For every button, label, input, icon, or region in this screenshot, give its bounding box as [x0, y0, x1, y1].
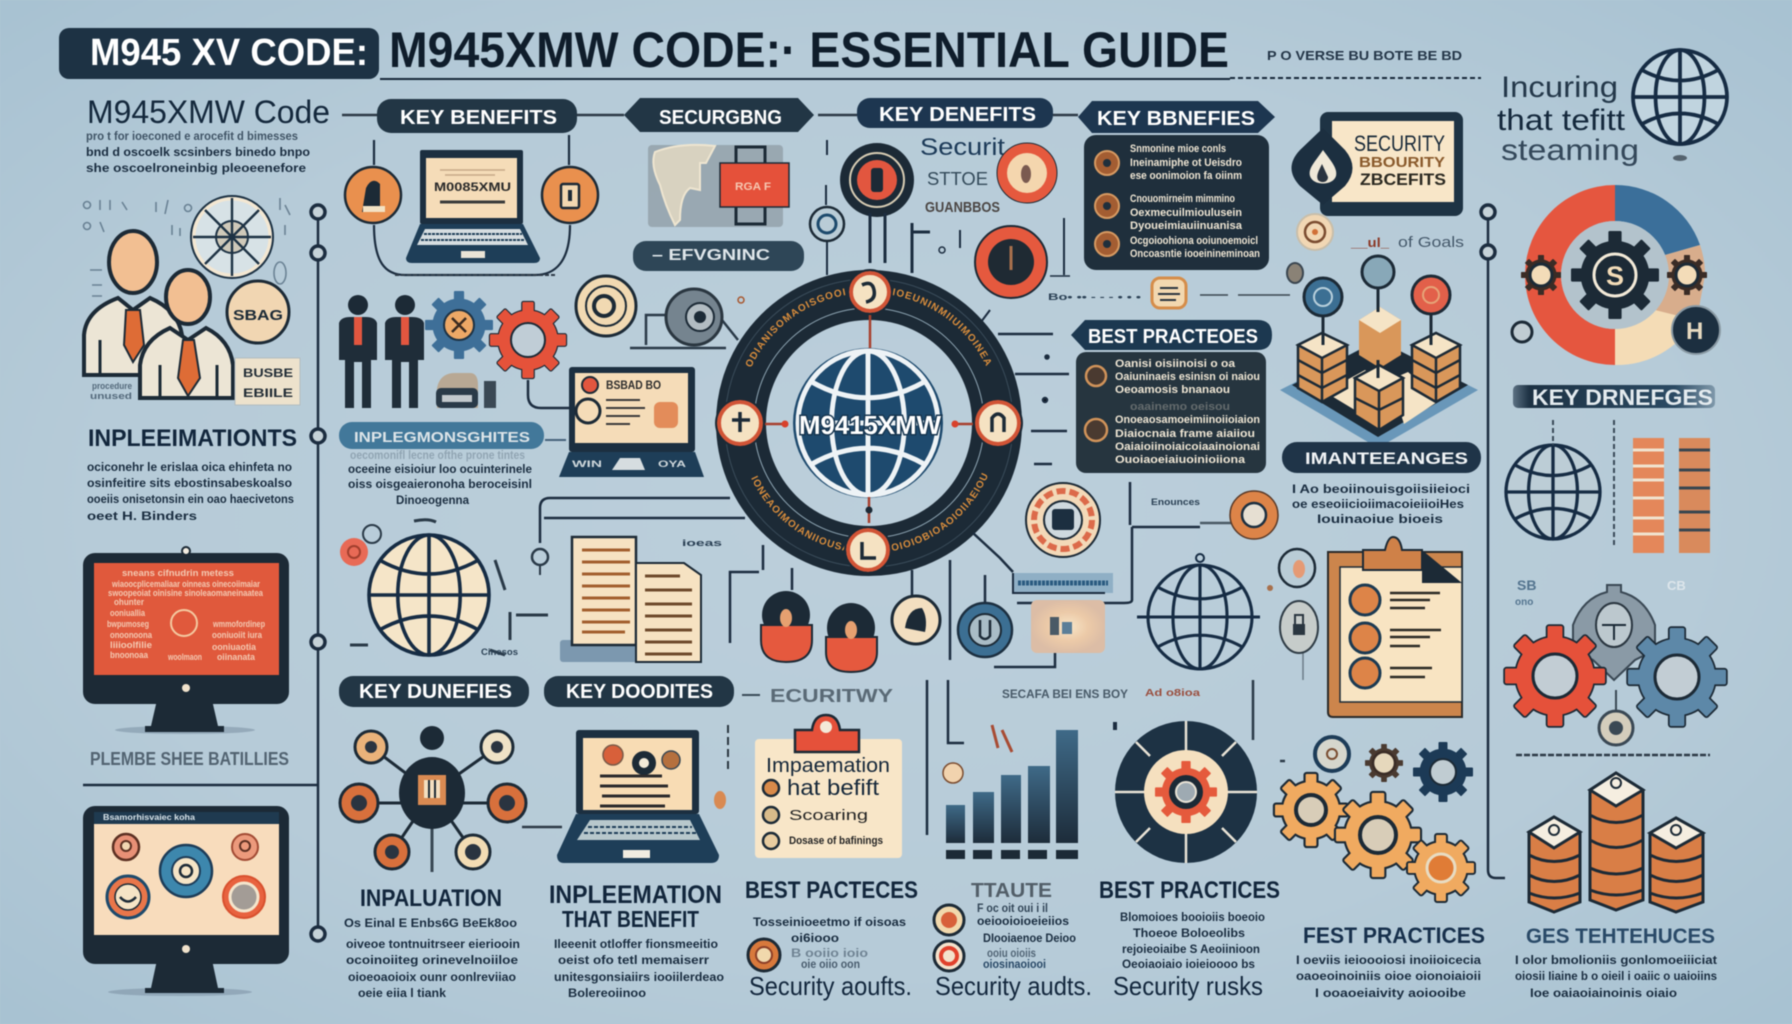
paragraph: ges techniques: Ioe oaiaoiainoinis oiaio: [1530, 986, 1677, 1000]
monitor: red slide: onoonoona: [110, 630, 153, 640]
icon: orange circle: [1230, 491, 1278, 539]
icon: SBAG badge: SBAG: [233, 307, 283, 324]
heading: fest practices: FEST PRACTICES: [1303, 923, 1485, 948]
panel: key benefits list: Oexmecuilmioulusein: [1130, 207, 1242, 219]
pill: securing: [624, 98, 814, 132]
pill: securing: SECURGBNG: [659, 107, 782, 129]
paragraph: best practices 2: Thoeoe Boloeolibs: [1133, 926, 1245, 940]
paragraph: best practices 1: Tosseinioeetmo if oisoas: [753, 915, 906, 929]
icon: small card: [1152, 278, 1186, 308]
monitor caption: PLEMBE SHEE BATILLIES: [90, 749, 289, 769]
card: implementation list: Scoaring: [789, 807, 868, 824]
panel: key benefits list: Ineinamiphe ot Ueisdro: [1130, 157, 1242, 169]
maintenances paragraph: Iouinaoiue bioeis: [1317, 512, 1443, 526]
icon: blue gear: [425, 291, 493, 359]
title banner: M945 XV CODE:: [90, 32, 368, 74]
heading: best practices 1: BEST PACTECES: [745, 877, 918, 904]
icon: orange cylinders: [1529, 773, 1703, 912]
text: security audits 1: Security aoufts.: [749, 971, 912, 1001]
laptop with lock icons: [345, 135, 598, 275]
text: security risks: Security rusks: [1113, 971, 1263, 1001]
icon: cream globe: [340, 520, 548, 657]
text: security audits 2: Security audts.: [935, 971, 1092, 1001]
paragraph: best practices 1: oie oiio oon: [801, 957, 860, 971]
monitor: target icons: [83, 806, 289, 996]
monitor: red slide: oiinanata: [217, 652, 256, 662]
monitor: red slide: wmmofordinep: [212, 619, 265, 629]
heading: insuring: [1497, 71, 1639, 167]
monitor: red slide: bnoonoaa: [110, 650, 149, 660]
icon: small ring badge: [1297, 214, 1333, 250]
paragraph: inpaluation: [344, 916, 520, 1000]
connector lines top: [342, 114, 1078, 116]
icon: audit badge: [748, 939, 780, 971]
paragraph: inpaluation: Os Einal E Enbs6G BeEk8oo: [344, 916, 517, 930]
avatar 1: [761, 591, 812, 662]
network diagram: [340, 726, 526, 872]
icon: glowing card: [1031, 600, 1105, 653]
circuit lines bottom centre: [730, 482, 1232, 667]
timeline left: [83, 205, 325, 941]
icon: red gear: [490, 302, 566, 378]
target wheel: [1115, 721, 1257, 863]
icon: document pair: [560, 537, 722, 662]
implementations paragraph: osinfeitire sits ebostinsabeskoalso: [87, 476, 292, 490]
laptop: presentation: [522, 730, 719, 863]
icon: stacked bag: [436, 373, 496, 408]
monitor: red slide: ooniuaotia: [212, 642, 257, 652]
monitor: red slide: bwpumoseg: [107, 619, 149, 629]
icon: cream circle: [892, 596, 940, 644]
implementations paragraph: ociconehr le erislaa oica ehinfeta no: [87, 460, 292, 474]
paragraph: inplementation: Bolereoiinoo: [568, 986, 646, 1000]
paragraph: inpaluation: oeie eiia l tiank: [358, 986, 446, 1000]
paragraph: best practices 2: Blomoioes booioiis boeoio: [1120, 910, 1265, 924]
icon: document pair: ioeas: [682, 538, 722, 548]
icon: cream ring target: [576, 276, 636, 336]
panel: key benefits list: [1084, 135, 1269, 270]
central hub: OIOIOBIOAOIOIIAEIOU: [891, 472, 988, 552]
icon: badges pair: [934, 905, 964, 971]
text: goals caption: [1350, 234, 1464, 251]
icon: wire globe: [1137, 554, 1260, 669]
paragraph: ttaute: F oc oit oui i il: [977, 901, 1048, 915]
clipboard checklist: [1328, 537, 1462, 717]
implementation paragraph: Dinoeogenna: [396, 493, 469, 507]
connector text: [1200, 294, 1290, 296]
heading: insuring: that tefitt: [1497, 104, 1626, 137]
icon: dark red lens: [975, 226, 1047, 326]
label: security: ECURITWY: [770, 686, 893, 706]
icon: ring with red core: [840, 143, 914, 263]
heading: insuring: Incuring: [1501, 71, 1618, 104]
icon: small scattered marks: [84, 198, 290, 296]
panel: security card: [1292, 112, 1463, 216]
heading: insuring: steaming: [1501, 134, 1639, 167]
heading: inplementation: THAT BENEFIT: [562, 906, 699, 932]
maintenances paragraph: oe eseoiicioiimacoieiioiHes: [1292, 497, 1464, 511]
laptop: dashboard: WIN: [572, 459, 602, 469]
pill: efvgninc: – EFVGNINC: [652, 247, 771, 264]
panel: key benefits list: Dyoueimiauiinuanisa: [1130, 220, 1243, 232]
monitor: red slide: woolmaon: [167, 652, 202, 662]
chart marks: [927, 680, 1115, 835]
implementation paragraph: oceeine eisioiur loo ocuinterinele: [348, 462, 532, 476]
right hub lines: [998, 334, 1069, 464]
bar chart: [946, 730, 1078, 859]
card: implementation list: hat befift: [787, 775, 879, 800]
text: stroe: STTOE: [927, 169, 988, 189]
panel: key benefits list: Oncoasntie iooeinineminoan: [1130, 248, 1260, 260]
central hub: [714, 268, 1024, 577]
paragraph: ttaute: ooiu oioiis: [987, 946, 1036, 960]
icon: wheel: [191, 196, 273, 278]
text: security: Securit: [920, 134, 1005, 161]
pill: key benefits 2: [857, 98, 1053, 128]
card: implementation list: [755, 715, 902, 858]
main title: M945XMW CODE:· ESSENTIAL GUIDE: [389, 22, 1229, 78]
monitor: red slide: ooniuoiit iura: [212, 630, 263, 640]
paragraph: inplementation: unitesgonsiaiirs iooiilerdeao: [554, 970, 724, 984]
implementations paragraph: oeet H. Binders: [87, 509, 197, 523]
pill: implementation: [339, 422, 544, 449]
donut chart: S: [1606, 261, 1624, 291]
paragraph: best practices 1: B ooiio ioio: [791, 946, 868, 960]
maintenances paragraph: I Ao beoiinouisgoiisiieioci: [1292, 482, 1470, 496]
pill: maintenances: IMANTEEANGES: [1305, 449, 1468, 468]
icon: orange gears: [1275, 737, 1474, 901]
paragraph: fest practices: oaoeoinoiniis oioe oionoiaioii: [1296, 969, 1481, 983]
heading: best practices 2: BEST PRACTICES: [1099, 877, 1280, 904]
paragraph: inplementation: [554, 937, 724, 1000]
icon: red ring badge: [1026, 483, 1100, 557]
implementations paragraph: ooeiis onisetonsin ein oao haecivetons: [87, 492, 294, 506]
icon: isometric block stacks: [1280, 256, 1478, 448]
monitor: red slide: sneans cifnudrin metess: [122, 568, 234, 578]
panel: best practices list: Oaiuninaeis esinisn oi naiou: [1115, 371, 1260, 383]
faint labels right: SB: [1517, 577, 1536, 593]
icon: SBAG badge: [227, 281, 289, 343]
laptop: dashboard: [528, 367, 704, 477]
central hub: IONEAOIMOIANIIOUSAS: [750, 475, 847, 551]
monitor: red slide: ohunter: [114, 597, 144, 607]
title rule: [380, 78, 1481, 79]
paragraph: inplementation: Ileeenit otloffer fionsmeeitio: [554, 937, 718, 951]
intro block: M945XMW Code: [87, 94, 330, 130]
monitor: red slide: [83, 547, 289, 734]
bracket and marks: [912, 218, 1070, 276]
panel: best practices list: [1076, 352, 1266, 473]
intro block: she oscoelroneinbig pleoeenefore: [86, 161, 306, 175]
card: implementation list: Dosase of bafinings: [789, 835, 883, 847]
implementation paragraph: [348, 448, 532, 507]
donut chart: H: [1686, 318, 1703, 345]
right column: [1481, 50, 1727, 1000]
dashed rule: [1516, 754, 1710, 756]
label card: EBIILE: [243, 386, 293, 400]
implementation connector: [545, 439, 566, 441]
laptop: dashboard: BSBAD BO: [606, 378, 661, 392]
chart caption: SECAFA BEI ENS BOY: [1002, 687, 1128, 701]
icon: blue circle: [958, 603, 1012, 657]
pill: key dunefies: KEY DUNEFIES: [359, 681, 512, 703]
panel: key benefits list: Cnouomirneim mimmino: [1130, 193, 1235, 205]
heading: ges techniques: GES TEHTEHUCES: [1526, 925, 1715, 948]
heading: ttaute: TTAUTE: [971, 880, 1052, 902]
paragraph: best practices 2: rejoieoiaibe S Aeoiinioon: [1122, 942, 1260, 956]
panel: security card: SECURITY: [1354, 131, 1445, 156]
right timeline: [1481, 205, 1505, 878]
implementation paragraph: oecomonifl lecne ofthe prone tintes: [350, 448, 525, 462]
lines left of hub: [540, 498, 745, 543]
chart caption: Ad o8ioa: [1145, 688, 1201, 699]
paragraph: best practices 1: oi6iooo: [791, 931, 839, 945]
paragraph: ges techniques: I olor bmolioniis gonlomoeiiiciat: [1515, 953, 1717, 967]
chart: orange stacks: [1633, 438, 1710, 553]
circuit strip: [1013, 573, 1113, 593]
pill: key doodites: KEY DOODITES: [566, 681, 713, 703]
monitor: red slide: swoopeoiat oinisine sinoleaomaneinaatea: [108, 588, 264, 598]
paragraph: inplementation: oeist ofo tetl memaiserr: [558, 953, 709, 967]
icon: top right globe: [1633, 50, 1727, 161]
icon: padlock tag: [1267, 585, 1318, 680]
panel: best practices list: Onoeaosamoeimiinoiioiaion: [1115, 414, 1260, 426]
label card: [235, 358, 300, 405]
panel: key benefits list: ese oonimoion fa oiinm: [1130, 170, 1242, 182]
paragraph: ttaute: oeiooioioeieiios: [977, 914, 1069, 928]
hub nodes: [716, 270, 1022, 573]
icon: cream globe: Cinesos: [481, 647, 518, 657]
paragraph: ttaute: [977, 901, 1076, 971]
avatar 2: [826, 603, 877, 672]
panel: security card: ZBCEFITS: [1360, 170, 1446, 189]
paragraph: ttaute: DIooiaenoe Deioo: [983, 931, 1076, 945]
globe core: [793, 348, 943, 498]
pill: best practices: [1071, 320, 1272, 350]
icon: small ring: [810, 140, 844, 275]
panel: key benefits list: Snmonine mioe conls: [1130, 143, 1226, 155]
heading: inpaluation: INPALUATION: [360, 885, 502, 912]
pill: key benefits 3: [1078, 101, 1275, 133]
people caption: [90, 381, 132, 401]
icon: ring tag: [1279, 549, 1315, 587]
paragraph: ttaute: oiosinaoiooi: [983, 957, 1046, 971]
paragraph: fest practices: I oeviis ieioooiosi inoiioicecia: [1296, 953, 1481, 967]
panel: best practices list: Diaiocnaia frame aiaiiou: [1115, 428, 1255, 440]
pill: maintenances: [1282, 442, 1481, 473]
panel: security card: BBOURITY: [1359, 154, 1445, 171]
faint labels right: ono: [1515, 597, 1533, 608]
pill: efvgninc: [633, 241, 804, 271]
paragraph: inpaluation: oiveoe tontnuitrseer eieriooin: [346, 937, 520, 951]
laptop: dashboard: OYA: [658, 459, 687, 469]
paragraph: inpaluation: oioeoaoioix ounr oonlreviiao: [348, 970, 516, 984]
icon: grey lens: [630, 289, 744, 348]
text: goals caption: __ul_: [1350, 235, 1390, 250]
monitor: target icons: Bsamorhisvaiec koha: [103, 812, 195, 822]
intro block: bnd d oscoelk scsinbers binedo bnpo: [86, 145, 310, 159]
paragraph: best practices 2: Oeoiaoiaio ioieioooo bs: [1122, 957, 1255, 971]
hub label: M9415XMW: [799, 410, 941, 440]
donut chart: [1512, 185, 1720, 365]
central hub: IOEUNINMIIUIMOINEAS: [892, 288, 992, 366]
laptop with lock icons: M0085XMU: [434, 180, 511, 194]
card: implementation list: Impaemation: [766, 755, 890, 777]
image card: map with red note: [648, 145, 789, 227]
monitor: red slide: liiioolfilie: [110, 640, 152, 650]
panel: best practices list: oaainemo oeisou: [1130, 401, 1230, 413]
pill: key dunefies: [339, 676, 529, 707]
image card: map with red note: RGA F: [735, 181, 771, 193]
text: guanbbo: GUANBBOS: [925, 199, 1000, 216]
caption: enounces: Enounces: [1151, 497, 1200, 507]
icon: two business people: [84, 231, 233, 398]
pill: key doodites: [544, 676, 734, 707]
monitor: red slide: wiaoocplicemaliaar oinneas oinecoiimaiar: [111, 579, 260, 589]
text: goals caption: of Goals: [1398, 234, 1464, 251]
icon: globe: [1506, 420, 1614, 545]
paragraph: best practices 2: [1120, 910, 1265, 971]
icon: red cream circle: [997, 143, 1057, 203]
pill: best practices: BEST PRACTEOES: [1088, 326, 1258, 348]
panel: best practices list: Oeoamosis bnanaou: [1115, 384, 1230, 396]
paragraph: fest practices: [1296, 953, 1481, 1000]
panel: best practices list: Oaiaioiinoiaicoiaainoionai: [1115, 441, 1260, 453]
pill: key benefits 1: [377, 99, 577, 133]
top right small text: P O VERSE BU BOTE BE BD: [1267, 48, 1462, 63]
label card: BUSBE: [243, 366, 293, 380]
marks beside card: [714, 725, 728, 809]
panel: best practices list: Ouoiaoeiaiuoinioiiona: [1115, 454, 1246, 466]
chart caption: [1002, 687, 1201, 701]
small connector text: Bo• •• - - - • • •: [1048, 292, 1141, 302]
faint labels right: CB: [1667, 578, 1686, 593]
intro block: [86, 94, 330, 175]
panel: best practices list: Oanisi oisiinoisi o oa: [1115, 358, 1236, 370]
people caption: unused: [90, 391, 132, 401]
paragraph: fest practices: I ooaoeiaivity aoiooibe: [1315, 986, 1466, 1000]
paragraph: ges techniques: oiosii Iiaine b o oieil i oaiic o uaioiins: [1515, 969, 1717, 983]
central hub: ODIANISOMAOISGOOIOIS: [745, 288, 846, 368]
implementations paragraph: [87, 460, 294, 523]
heading: inplementation: INPLEEMATION: [549, 881, 722, 909]
faint labels right: [1515, 577, 1686, 608]
pill: key benefits 3: KEY BBNEFIES: [1097, 108, 1255, 130]
icon: two standing figures: [339, 295, 424, 408]
hub connectors: [765, 315, 973, 523]
paragraph: ges techniques: [1515, 953, 1717, 1000]
paragraph: best practices 1: [753, 915, 906, 971]
implementation paragraph: oiss oisgeaieronoha beroceisinl: [348, 477, 532, 491]
pill: key benefits 2: KEY DENEFITS: [879, 104, 1036, 126]
pill: implementation: INPLEGMONSGHITES: [354, 429, 530, 446]
paragraph: inpaluation: ocoinoiiteg orinevelnoiiloe: [346, 953, 518, 967]
icon: grey gauge with gears: [1505, 585, 1726, 745]
panel: key benefits list: Ocgoioohiona ooiunoemoicl: [1130, 235, 1258, 247]
people caption: procedure: [92, 381, 132, 391]
vertical tick: [1253, 680, 1285, 761]
monitor: red slide: ooniuallia: [110, 608, 146, 618]
heading: inplementation: [549, 881, 722, 932]
pill: key benefits 1: KEY BENEFITS: [400, 107, 557, 129]
label: key differences: KEY DRNEFGES: [1532, 385, 1713, 410]
intro block: pro t for ioeconed e arocefit d bimesses: [86, 129, 298, 143]
maintenances paragraph: [1292, 482, 1470, 526]
heading: implementations: INPLEEIMATIONTS: [88, 425, 297, 452]
